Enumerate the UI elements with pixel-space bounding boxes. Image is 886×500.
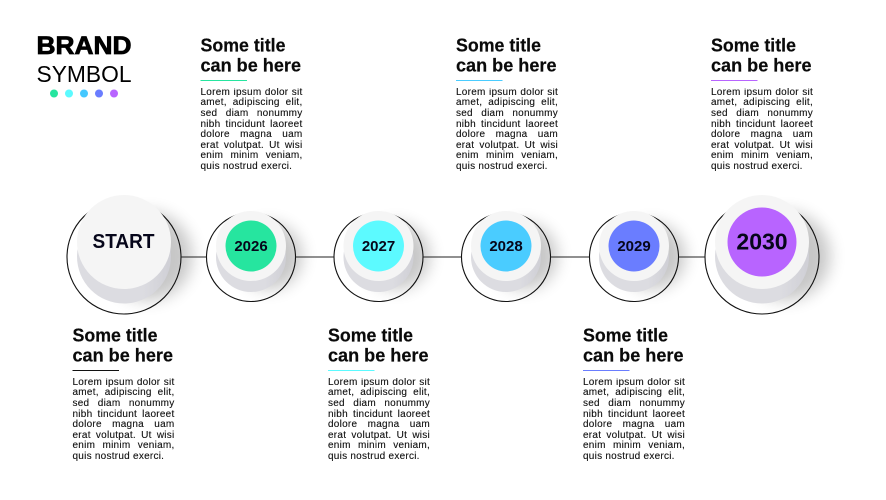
body text: amet, adipiscing elit, (583, 387, 685, 398)
underline (583, 370, 630, 371)
body text: amet, adipiscing elit, (711, 97, 813, 108)
body text: dolore magna uam (328, 419, 430, 430)
timeline connector segments (181, 256, 705, 258)
body text: erat volutpat. Ut wisi (200, 140, 302, 151)
body text: sed diam nonummy (711, 108, 813, 119)
body text: enim minim veniam, (72, 440, 174, 451)
node: 2027: 2027 (362, 238, 395, 255)
title (200, 36, 301, 76)
body text: sed diam nonummy (456, 108, 558, 119)
brand symbol word: SYMBOL (36, 61, 132, 87)
node: 2030 (705, 195, 830, 314)
node: start: START (92, 231, 154, 253)
title: can be here (200, 56, 301, 76)
title: Some title (200, 36, 286, 56)
body text: sed diam nonummy (72, 398, 174, 409)
body text: nibh tincidunt laoreet (583, 409, 685, 420)
text block: 2030 (711, 36, 814, 178)
body text (72, 378, 176, 468)
body text: dolore magna uam (72, 419, 174, 430)
body text: enim minim veniam, (200, 150, 302, 161)
node: 2028 (462, 211, 557, 302)
body text: dolore magna uam (200, 129, 302, 140)
body text: erat volutpat. Ut wisi (456, 140, 558, 151)
title: Some title (328, 326, 413, 346)
text block: 2029 (583, 326, 686, 468)
title (456, 36, 556, 76)
title: Some title (72, 326, 158, 346)
node: 2029: 2029 (617, 238, 651, 255)
body text: erat volutpat. Ut wisi (583, 430, 685, 441)
body text (456, 88, 559, 178)
brand colour dots (50, 90, 118, 98)
title (328, 326, 428, 366)
underline (72, 370, 119, 371)
body text: nibh tincidunt laoreet (200, 119, 302, 130)
node: 2026: 2026 (234, 238, 268, 255)
text block: 2027 (328, 326, 431, 468)
body text: erat volutpat. Ut wisi (328, 430, 430, 441)
body text: enim minim veniam, (456, 150, 558, 161)
node: 2027 (334, 211, 430, 302)
underline (456, 80, 502, 81)
body text: nibh tincidunt laoreet (328, 409, 430, 420)
underline (200, 80, 247, 81)
title: Some title (583, 326, 668, 346)
title: can be here (711, 56, 812, 76)
brand name: BRAND (36, 32, 132, 60)
body text: sed diam nonummy (328, 398, 430, 409)
node: 2026 (206, 211, 302, 302)
body text (200, 88, 304, 178)
body text: nibh tincidunt laoreet (711, 119, 813, 130)
title: can be here (72, 346, 173, 366)
underline (711, 80, 758, 81)
title (711, 36, 812, 76)
body text: amet, adipiscing elit, (72, 387, 174, 398)
body text: nibh tincidunt laoreet (456, 119, 558, 130)
body text: sed diam nonummy (200, 108, 302, 119)
body text: enim minim veniam, (583, 440, 685, 451)
body text: quis nostrud exerci. (328, 451, 420, 462)
node: start (67, 195, 192, 314)
title: Some title (456, 36, 541, 56)
text block: 2026 (200, 36, 304, 178)
body text (711, 88, 814, 178)
body text: enim minim veniam, (711, 150, 813, 161)
title (583, 326, 684, 366)
title (72, 326, 173, 366)
body text: amet, adipiscing elit, (328, 387, 430, 398)
title: can be here (456, 56, 556, 76)
body text: amet, adipiscing elit, (456, 97, 558, 108)
body text: enim minim veniam, (328, 440, 430, 451)
title: can be here (583, 346, 684, 366)
body text: quis nostrud exerci. (72, 451, 164, 462)
text block: 2028 (456, 36, 559, 178)
body text: erat volutpat. Ut wisi (72, 430, 174, 441)
body text: quis nostrud exerci. (711, 161, 803, 172)
body text (583, 378, 686, 468)
title: Some title (711, 36, 796, 56)
body text: quis nostrud exerci. (456, 161, 548, 172)
title: can be here (328, 346, 428, 366)
underline (328, 370, 374, 371)
body text: dolore magna uam (583, 419, 685, 430)
text block: start (72, 326, 176, 468)
body text: dolore magna uam (456, 129, 558, 140)
body text: sed diam nonummy (583, 398, 685, 409)
brand logo (36, 32, 132, 98)
node: 2029 (590, 211, 685, 302)
body text: amet, adipiscing elit, (200, 97, 302, 108)
node: 2028: 2028 (489, 238, 523, 255)
body text: erat volutpat. Ut wisi (711, 140, 813, 151)
node: 2030: 2030 (736, 228, 788, 254)
body text: nibh tincidunt laoreet (72, 409, 174, 420)
body text: dolore magna uam (711, 129, 813, 140)
body text: quis nostrud exerci. (583, 451, 675, 462)
body text: quis nostrud exerci. (200, 161, 292, 172)
body text (328, 378, 431, 468)
